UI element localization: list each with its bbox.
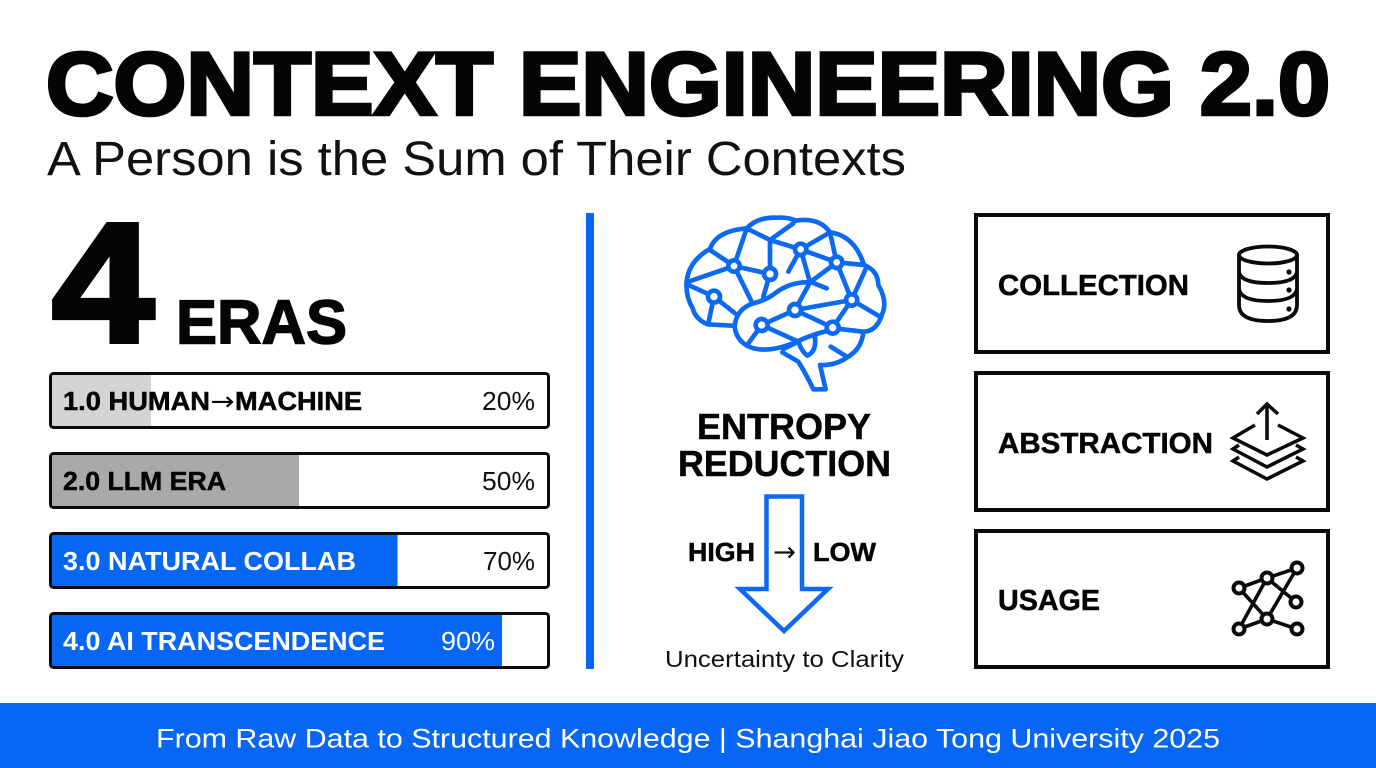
progress bar: era 3.0 — [50, 534, 548, 588]
heading: entropy reduction: ENTROPY — [697, 406, 871, 447]
panel: four eras — [50, 188, 548, 668]
progress bar: era 3.0: 70% — [483, 546, 535, 576]
subtitle: A Person is the Sum of Their Contexts — [47, 133, 906, 186]
progress bar: era 4.0: 4.0 AI TRANSCENDENCE — [63, 628, 385, 656]
label: high to low: LOW — [813, 537, 876, 567]
heading: entropy reduction — [678, 406, 891, 484]
progress bar: era 4.0: 90% — [441, 626, 495, 656]
icon: brain network — [686, 218, 884, 389]
title: CONTEXT ENGINEERING 2.0 — [46, 34, 1330, 134]
heading: 4 eras: ERAS — [176, 288, 347, 358]
caption: Uncertainty to Clarity — [665, 646, 904, 672]
panel: usage — [976, 531, 1328, 667]
panel: collection — [976, 215, 1328, 352]
label: high to low — [688, 537, 876, 568]
panel: entropy reduction — [665, 218, 904, 672]
progress bar: era 2.0: 50% — [482, 466, 535, 496]
heading: 4 eras — [52, 188, 347, 378]
heading: 4 eras: 4 — [52, 188, 154, 378]
panel: abstraction: ABSTRACTION — [998, 428, 1213, 460]
progress bar: era 1.0: 20% — [482, 386, 535, 416]
arrow: downward entropy — [740, 496, 828, 631]
label: high to low: HIGH — [688, 537, 755, 567]
footer banner — [0, 703, 1376, 768]
progress bar: era 3.0: 3.0 NATURAL COLLAB — [63, 548, 356, 576]
panel: usage: USAGE — [998, 585, 1100, 617]
icon: network graph — [1234, 562, 1302, 634]
progress bar: era 1.0 — [50, 374, 548, 428]
progress bar: era 1.0: MACHINE — [235, 388, 362, 416]
heading: entropy reduction: REDUCTION — [678, 443, 891, 484]
panel: abstraction — [976, 373, 1328, 510]
progress bar: era 2.0 — [50, 454, 548, 508]
panel: collection: COLLECTION — [998, 270, 1189, 302]
progress bar: era 1.0: → — [210, 387, 234, 417]
icon: layers with arrow — [1233, 404, 1303, 479]
icon: database — [1239, 246, 1297, 321]
label: high to low: → — [773, 537, 796, 568]
footer banner: From Raw Data to Structured Knowledge | Shanghai Jiao Tong University 2025 — [156, 724, 1220, 754]
progress bar: era 1.0: 1.0 HUMAN — [63, 388, 210, 416]
progress bar: era 4.0 — [50, 614, 548, 668]
progress bar: era 2.0: 2.0 LLM ERA — [63, 468, 226, 496]
